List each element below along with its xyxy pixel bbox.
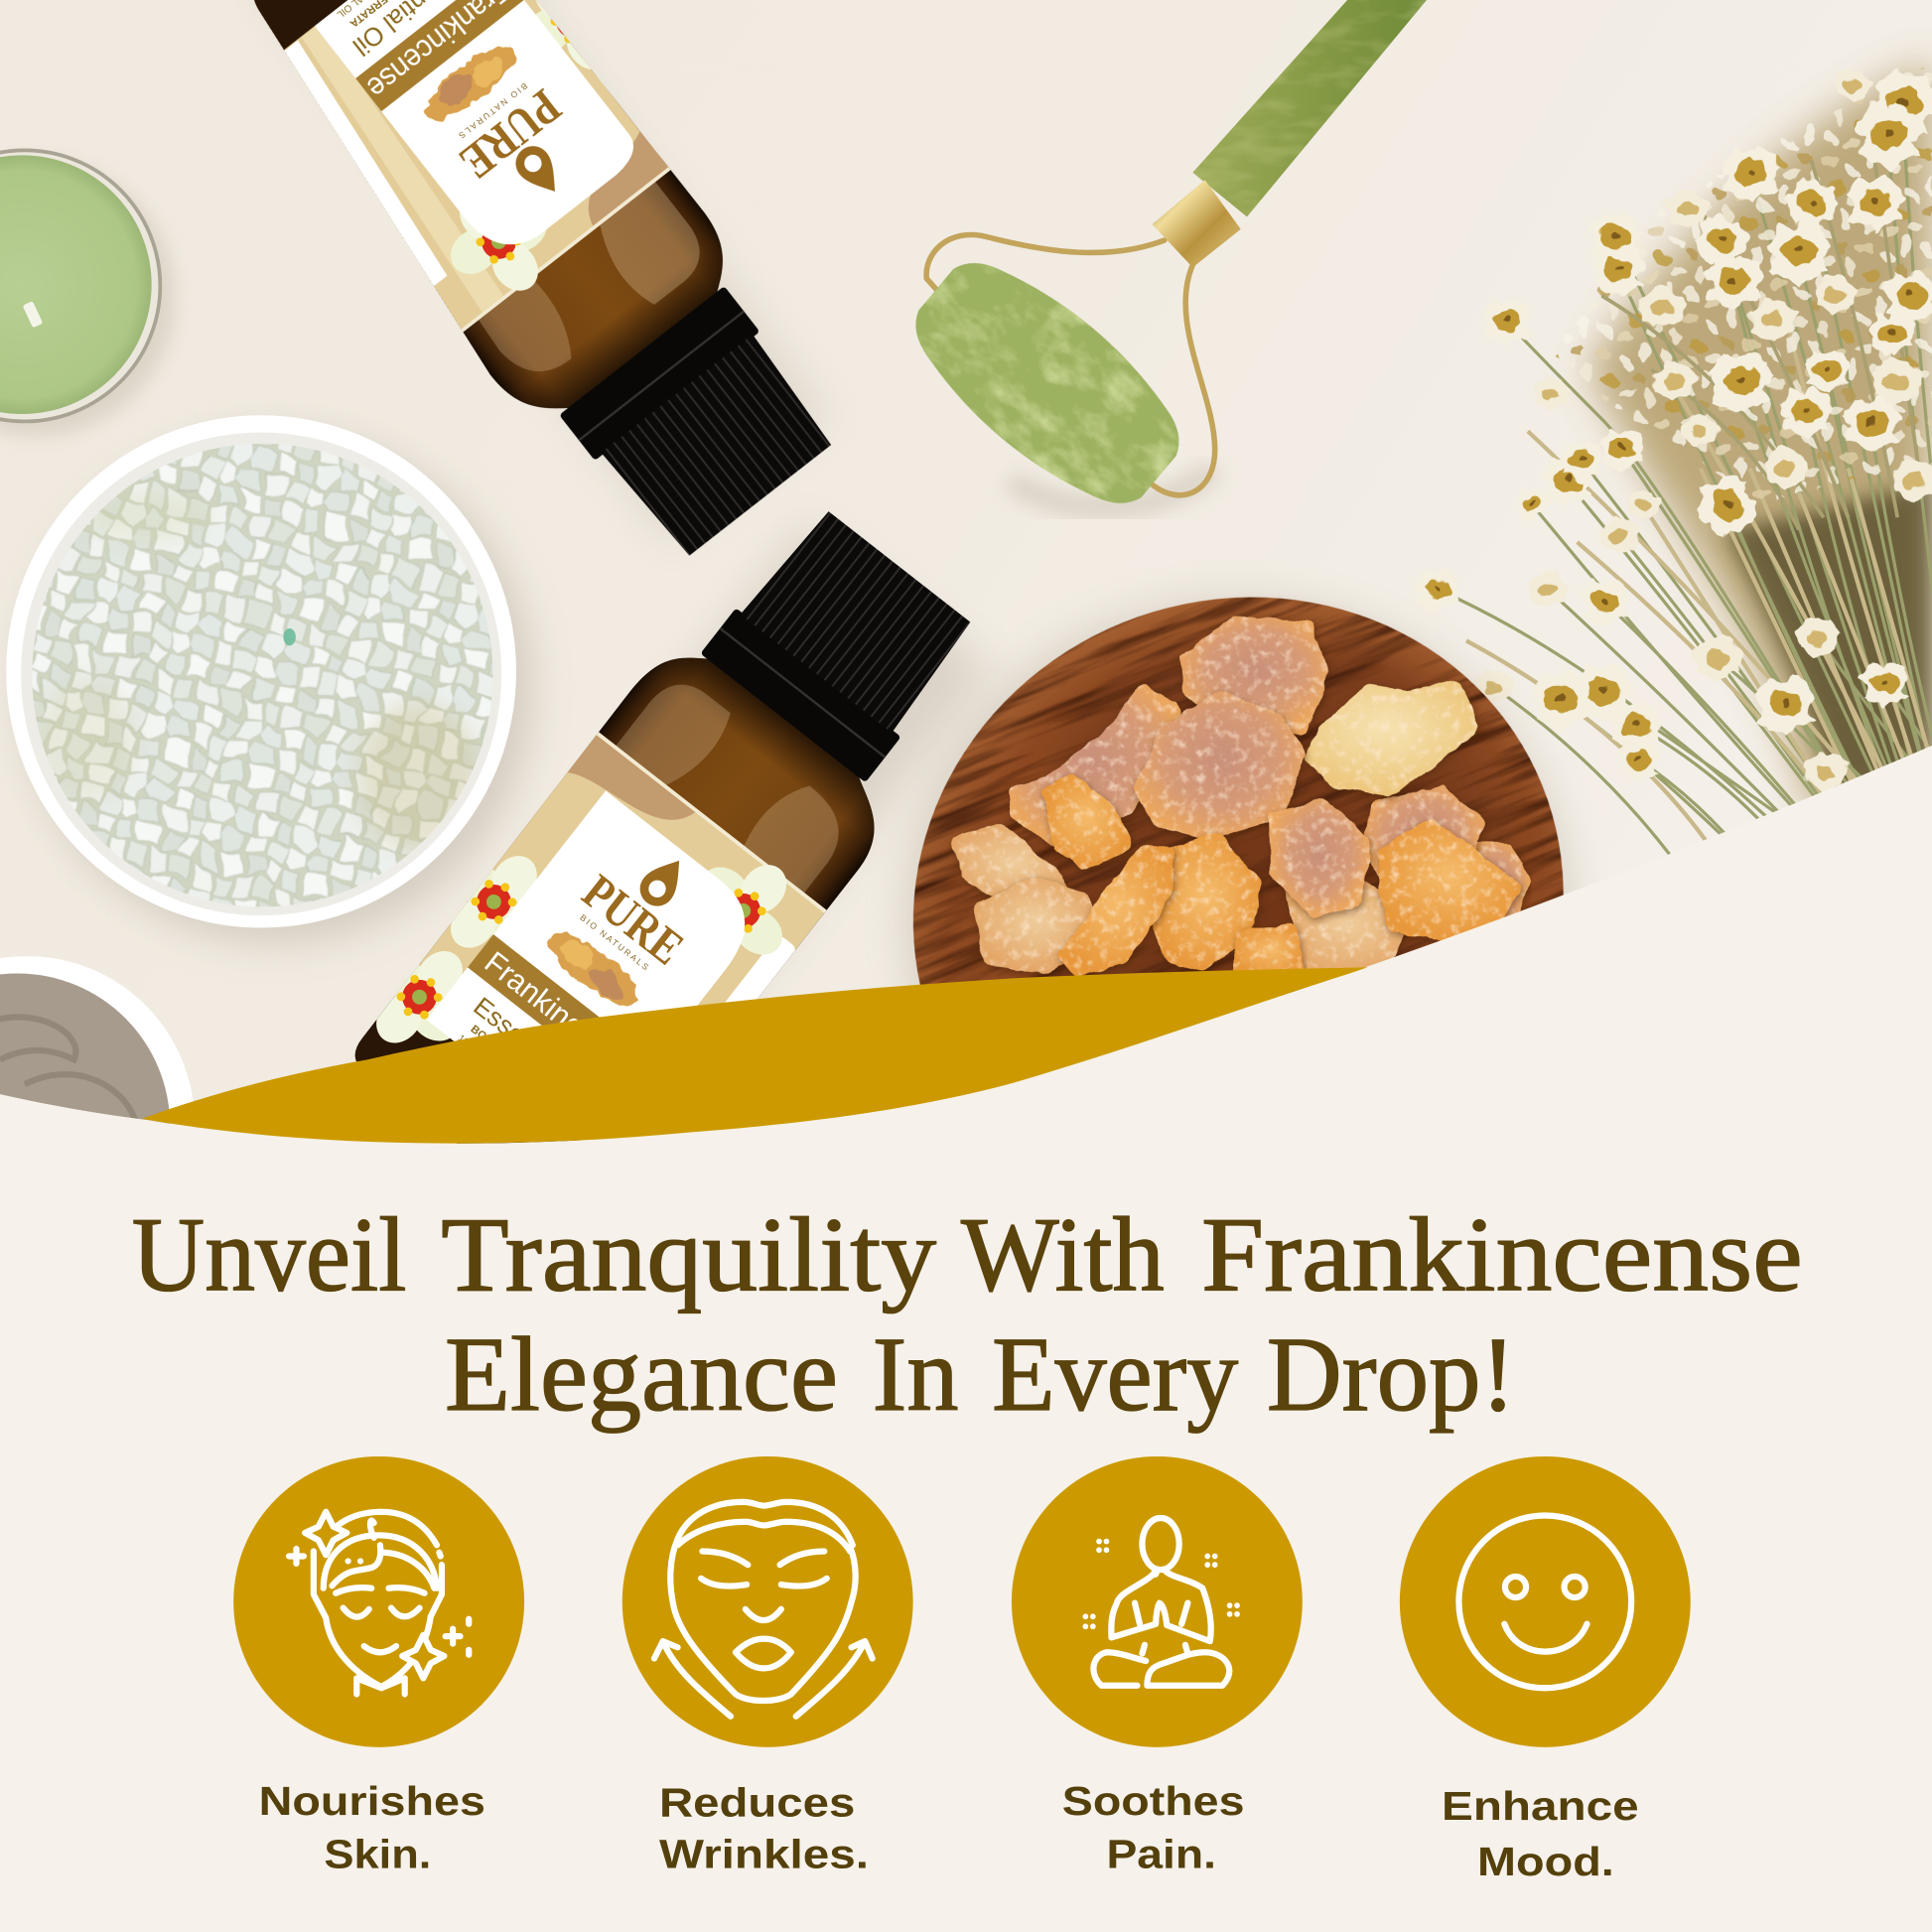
- title: With: [961, 1196, 1165, 1313]
- label: Wrinkles.: [659, 1831, 869, 1876]
- label: Enhance: [1442, 1783, 1639, 1829]
- clay mask bowl: [0, 956, 195, 1292]
- glass body: [345, 629, 907, 1234]
- roller frame wire: [926, 235, 1215, 495]
- gold disc: [1400, 1456, 1691, 1747]
- bottle: upper, inverted: [254, 0, 832, 556]
- cream lower panel with curved top edge: [0, 746, 1932, 1932]
- benefit: enhance mood: [1400, 1456, 1691, 1884]
- loose petal layer: [1555, 62, 1932, 505]
- benefit: nourishes skin: [233, 1456, 524, 1876]
- label: [659, 1779, 869, 1876]
- benefit: reduces wrinkles: [622, 1456, 913, 1876]
- white bowl of bath salt: [6, 415, 532, 942]
- salt crystals: [32, 444, 492, 907]
- photo background surface: [0, 0, 1932, 1232]
- flower heads: [1415, 62, 1932, 792]
- label lighter stripe: [302, 27, 503, 312]
- title: Unveil: [132, 1196, 407, 1313]
- gold disc: [1012, 1456, 1303, 1747]
- gold ferrule: [1152, 180, 1241, 267]
- resin pieces: [959, 623, 1523, 973]
- label flowers: [451, 211, 547, 291]
- label: Skin.: [324, 1831, 431, 1876]
- brand text: PURE: [450, 78, 571, 191]
- paper label: Essential Oil: [468, 991, 600, 1103]
- brand drop logo: [633, 850, 693, 913]
- title: Every: [992, 1316, 1238, 1434]
- brand text: PURE: [573, 864, 694, 975]
- label tan patch: [588, 131, 669, 226]
- label tan patch: [562, 733, 695, 852]
- icon: meditating figure: [1083, 1518, 1240, 1686]
- white strip: [605, 933, 798, 1173]
- label: Reduces: [659, 1779, 855, 1825]
- stems: [1437, 102, 1932, 973]
- cap collar: [559, 286, 759, 461]
- ribbed cap: [601, 335, 836, 559]
- paper label: [284, 0, 671, 333]
- bouquet tan mass: [1589, 62, 1932, 813]
- label: [259, 1778, 485, 1876]
- gold disc: [233, 1456, 524, 1747]
- icon: smiley: [1458, 1516, 1631, 1688]
- stems over petals: [1601, 148, 1922, 530]
- title: Drop!: [1267, 1316, 1516, 1434]
- title: [132, 1196, 1803, 1434]
- label: [1442, 1783, 1639, 1884]
- title: Frankincense: [1201, 1196, 1803, 1313]
- title: In: [873, 1316, 959, 1434]
- resin picture: [540, 921, 648, 1018]
- paper label: [344, 710, 831, 1207]
- white front panel: [314, 0, 633, 244]
- dried chamomile bouquet: [1415, 62, 1932, 973]
- name band: [468, 934, 654, 1093]
- label: [1062, 1778, 1244, 1876]
- glass body: [209, 0, 752, 438]
- name band: [355, 0, 524, 111]
- cap collar: [700, 608, 901, 782]
- wooden bowl of frankincense resin: [819, 499, 1658, 1316]
- label: Mood.: [1477, 1839, 1614, 1884]
- paper label: BIO NATURALS: [456, 80, 529, 142]
- ribbed cap: [741, 507, 975, 733]
- paper label: BOSWELLIA SERRATA: [469, 1024, 571, 1107]
- gold disc: [622, 1456, 913, 1747]
- white front panel: [427, 790, 766, 1146]
- candle in glass holder: [0, 150, 175, 436]
- label: Nourishes: [259, 1778, 485, 1824]
- paper label: BIO NATURALS: [578, 912, 652, 973]
- label: Soothes: [1062, 1778, 1244, 1824]
- jade roller: [890, 0, 1432, 531]
- title: Elegance: [445, 1316, 838, 1434]
- icon: face with sparkles: [289, 1512, 469, 1694]
- label: Pain.: [1106, 1831, 1216, 1876]
- resin picture: [423, 46, 517, 123]
- jade stone: [890, 235, 1204, 531]
- wood bowl: [819, 499, 1658, 1316]
- paper label: 100% PURE ESSENTIAL OIL: [456, 1033, 565, 1122]
- title: Tranquility: [441, 1196, 936, 1313]
- bottle: lower, upright: [317, 465, 1023, 1241]
- sparkle stars: [305, 1512, 346, 1555]
- roller handle: [1192, 0, 1432, 216]
- icon: lifted face with arrows: [654, 1502, 873, 1717]
- brand drop logo: [515, 145, 556, 193]
- benefit: soothes pain: [1012, 1456, 1303, 1876]
- label flowers: [667, 834, 817, 986]
- paper label: Frankincense: [479, 944, 641, 1083]
- white strip: [284, 40, 447, 286]
- gold swoosh: [142, 967, 1368, 1144]
